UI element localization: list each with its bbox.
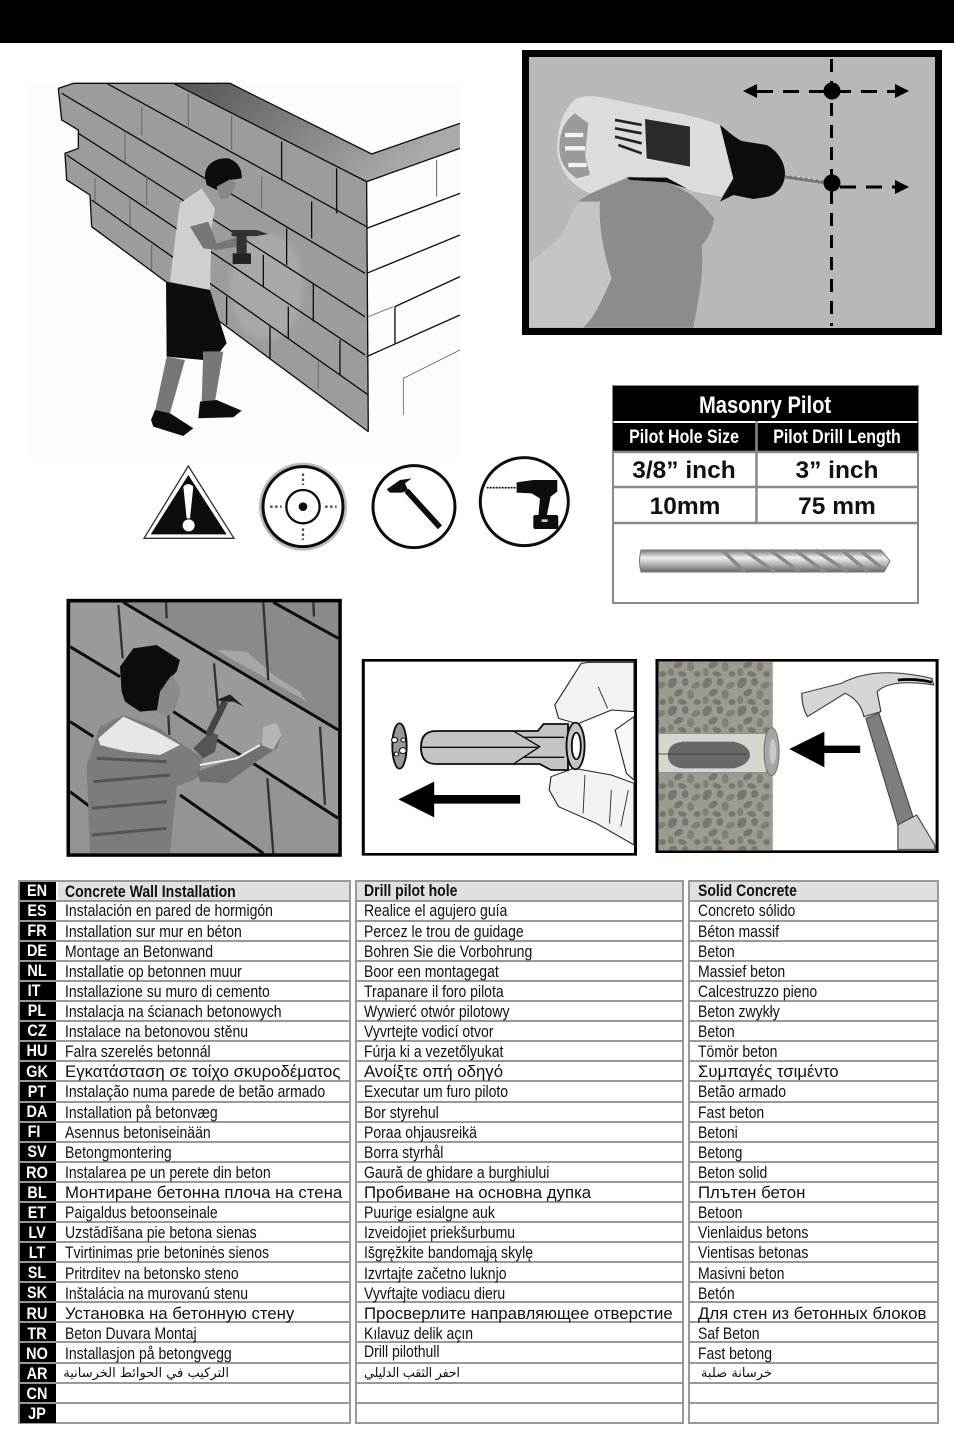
icon: cordless drill (480, 458, 568, 546)
man: t-shirt (87, 715, 203, 853)
column: concrete wall installation: Installatie op betonnen muur (65, 963, 242, 981)
column: drill pilot hole: Percez le trou de guidage (364, 923, 524, 941)
brick wall lines (70, 602, 338, 853)
column: solid concrete: Beton (698, 1023, 735, 1041)
column: solid concrete: Beton solid (698, 1164, 767, 1182)
panel frame (526, 54, 938, 332)
metric row: 10mm (650, 493, 720, 520)
arrow pointing left (789, 732, 860, 767)
column: solid concrete: Vientisas betonas (698, 1244, 809, 1262)
column: concrete wall installation: Installasjon på betongvegg (65, 1345, 232, 1363)
column: solid concrete: Solid Concrete (698, 882, 797, 900)
column: concrete wall installation: Instalacja na ścianach betonowych (65, 1003, 282, 1021)
man: head (205, 158, 242, 190)
language code column: FI (28, 1123, 40, 1141)
pilot hole and anchor (658, 733, 766, 773)
drill bit (785, 177, 825, 182)
wall anchor (421, 724, 568, 770)
table: Masonry Pilot specifications (613, 386, 918, 603)
column: drill pilot hole: Drill pilothull (364, 1343, 440, 1361)
column: drill pilot hole: Drill pilot hole (364, 882, 457, 900)
panel: hammering anchor into solid concrete (657, 660, 937, 852)
column: concrete wall installation: Instalación en pared de hormigón (65, 902, 273, 920)
language code column: JP (28, 1405, 46, 1423)
metric row (650, 493, 876, 520)
column: concrete wall installation: Монтиране бетонна плоча на стена (65, 1183, 343, 1202)
language code column: RO (26, 1164, 48, 1182)
column: concrete wall installation: Installation sur mur en béton (65, 923, 242, 941)
column: concrete wall installation: التركيب في الحوائط الخرسانية (63, 1366, 229, 1381)
language code column (20, 882, 56, 1423)
column: solid concrete: Concreto sólido (698, 902, 795, 920)
column headers: Pilot Drill Length (773, 426, 901, 447)
man: raised arms (197, 725, 282, 783)
language code column: HU (27, 1042, 47, 1060)
wall hole marker (392, 723, 407, 769)
column: solid concrete: Tömör beton (698, 1043, 777, 1061)
column: drill pilot hole: Executar um furo piloto (364, 1083, 508, 1101)
language code column: AR (27, 1365, 48, 1383)
language code column: LT (29, 1244, 46, 1262)
panel: inserting anchor into pilot hole (363, 660, 635, 854)
column: concrete wall installation: Pritrditev na betonsko steno (65, 1265, 239, 1283)
column: solid concrete (698, 882, 926, 1381)
table title (613, 386, 918, 421)
imperial row (632, 457, 879, 484)
column: solid concrete: Calcestruzzo pieno (698, 983, 817, 1001)
photo frame (68, 601, 340, 855)
column: solid concrete: Masivni beton (698, 1265, 784, 1283)
column: drill pilot hole (364, 882, 673, 1381)
fingers (555, 662, 634, 724)
language code column: FR (27, 922, 47, 940)
column: drill pilot hole: Izveidojiet priekšurbumu (364, 1224, 515, 1242)
imperial row: 3” inch (795, 457, 879, 484)
vertical dashed guide line (830, 59, 833, 326)
language code column: SV (27, 1143, 47, 1161)
column: drill pilot hole: Просверлите направляющее отверстие (364, 1304, 673, 1323)
man: shorts (166, 282, 227, 360)
concrete cross section (658, 662, 773, 850)
column: solid concrete: Fast beton (698, 1104, 764, 1122)
language code column: NO (26, 1345, 48, 1363)
man: legs (155, 352, 223, 413)
language code column: CZ (27, 1022, 47, 1040)
illustration: man drilling into concrete block wall (28, 83, 460, 458)
column: concrete wall installation: Установка на бетонную стену (65, 1304, 295, 1323)
column: drill pilot hole: Пробиване на основна дупка (364, 1183, 592, 1202)
man: arm (190, 222, 247, 250)
panel frame (363, 660, 635, 854)
icon: hammer (373, 466, 455, 548)
column: solid concrete: Saf Beton (698, 1325, 760, 1343)
column: concrete wall installation: Concrete Wall Installation (65, 883, 236, 901)
panel: drill with alignment guides (526, 54, 938, 332)
column: concrete wall installation: Installazione su muro di cemento (65, 983, 270, 1001)
column: concrete wall installation: Asennus betoniseinään (65, 1124, 211, 1142)
man: head (120, 645, 180, 712)
column: drill pilot hole: Gaură de ghidare a burghiului (364, 1164, 549, 1182)
multi-language translation table (19, 881, 938, 1423)
column: solid concrete: Beton (698, 943, 735, 961)
language code column: PL (28, 1002, 47, 1020)
column: solid concrete: Betoni (698, 1124, 738, 1142)
language code column: SK (27, 1284, 48, 1302)
language code column: NL (27, 962, 47, 980)
column: drill pilot hole: Wywierć otwór pilotowy (364, 1003, 510, 1021)
column headers (613, 423, 918, 451)
column: drill pilot hole: Bor styrehul (364, 1104, 439, 1122)
language code column: RU (27, 1305, 47, 1323)
column: concrete wall installation: Beton Duvara Montaj (65, 1325, 197, 1343)
language code column: IT (28, 982, 41, 1000)
upper dashed guide with arrows and marker (743, 82, 909, 100)
language code column: ET (28, 1204, 47, 1222)
column: concrete wall installation: Instalação numa parede de betão armado (65, 1083, 325, 1101)
column: solid concrete: Плътен бетон (698, 1183, 805, 1202)
language code column: DE (27, 942, 47, 960)
column: drill pilot hole: احفر الثقب الدليلي (364, 1366, 460, 1381)
imperial row: 3/8” inch (632, 457, 736, 484)
column: drill pilot hole: Bohren Sie die Vorbohrung (364, 943, 532, 961)
drill chuck (720, 125, 785, 202)
column: solid concrete: Beton zwykły (698, 1003, 780, 1021)
table title: Masonry Pilot (699, 391, 832, 418)
safety and tool icons (144, 458, 568, 549)
column: drill pilot hole: Vyvrtejte vodicí otvor (364, 1023, 494, 1041)
hammer (866, 713, 913, 825)
column: concrete wall installation: Betongmontering (65, 1144, 172, 1162)
column: concrete wall installation: Falra szerelés betonnál (65, 1043, 211, 1061)
hand (529, 177, 714, 328)
column: solid concrete: خرسانة صلبة (701, 1366, 772, 1381)
table background and border (613, 386, 918, 603)
lower dashed guide with arrow and marker (824, 174, 909, 194)
language code column: GK (26, 1063, 48, 1081)
drill body (557, 96, 733, 197)
column: solid concrete: Betong (698, 1144, 742, 1162)
column: solid concrete: Для стен из бетонных блоков (698, 1304, 926, 1323)
arrow pointing left (398, 782, 520, 817)
table grid (19, 881, 938, 1423)
chalk patch on wall (217, 650, 307, 702)
language code column: TR (27, 1325, 47, 1343)
language code column: DA (27, 1103, 47, 1121)
language code column: ES (27, 902, 47, 920)
man: shoes (151, 400, 242, 436)
man: drill (232, 230, 268, 264)
column: drill pilot hole: Vyvŕtajte vodiacu dieru (364, 1285, 505, 1303)
column: solid concrete: Betón (698, 1285, 735, 1303)
icon: target crosshair (260, 464, 346, 549)
column: drill pilot hole: Ανοίξτε οπή οδηγό (364, 1062, 503, 1081)
column headers: Pilot Hole Size (629, 426, 739, 447)
column: concrete wall installation: Εγκατάσταση σε τοίχο σκυροδέματος (65, 1062, 340, 1081)
hammer (208, 702, 225, 735)
column: solid concrete: Συμπαγές τσιμέντο (698, 1062, 839, 1081)
man: shirt (170, 188, 215, 290)
language code column: PT (28, 1083, 47, 1101)
column: drill pilot hole: Trapanare il foro pilota (364, 983, 504, 1001)
wall face highlight (230, 233, 303, 340)
column: drill pilot hole: Kılavuz delik açın (364, 1325, 473, 1343)
photo: hand holding drill (529, 96, 825, 328)
column: solid concrete: Vienlaidus betons (698, 1224, 809, 1242)
column: drill pilot hole: Realice el agujero guía (364, 902, 508, 920)
wall top surface (173, 83, 460, 182)
upper wall shade (123, 602, 338, 730)
column: concrete wall installation: Tvirtinimas prie betoninės sienos (65, 1244, 269, 1262)
drill vents (615, 120, 642, 153)
panel frame (657, 660, 937, 852)
column: concrete wall installation: Montage an Betonwand (65, 943, 213, 961)
column: drill pilot hole: Borra styrhål (364, 1144, 443, 1162)
column: drill pilot hole: Poraa ohjausreikä (364, 1124, 477, 1142)
column: solid concrete: Massief beton (698, 963, 785, 981)
panel: man hammering anchor into wall (68, 601, 340, 855)
column: solid concrete: Béton massif (698, 923, 780, 941)
column: drill pilot hole: Išgręžkite bandomąją skylę (364, 1244, 533, 1262)
language code column: CN (27, 1385, 47, 1403)
column: drill pilot hole: Boor een montagegat (364, 963, 499, 981)
column: concrete wall installation: Instalace na betonovou stěnu (65, 1023, 248, 1041)
metric row: 75 mm (798, 493, 876, 520)
column: concrete wall installation: Installation på betonvæg (65, 1104, 218, 1122)
language code column: BL (27, 1184, 47, 1202)
column: drill pilot hole: Izvrtajte začetno luknjo (364, 1265, 507, 1283)
drill label (645, 119, 690, 167)
language code column: LV (28, 1224, 46, 1242)
wall left face (58, 83, 368, 432)
column: concrete wall installation: Uzstādīšana pie betona sienas (65, 1224, 257, 1242)
column: solid concrete: Betoon (698, 1204, 742, 1222)
column: drill pilot hole: Puurige esialgne auk (364, 1204, 495, 1222)
top black header bar (0, 0, 954, 43)
column: solid concrete: Betão armado (698, 1083, 786, 1101)
drill bit image (640, 550, 890, 572)
wall mortar lines (58, 83, 460, 432)
column: concrete wall installation: Inštalácia na murovanú stenu (65, 1285, 248, 1303)
language code column: EN (27, 882, 47, 900)
column: concrete wall installation (63, 883, 343, 1381)
icon: warning triangle (144, 466, 234, 538)
language code column: SL (28, 1264, 47, 1282)
column: concrete wall installation: Paigaldus betoonseinale (65, 1204, 218, 1222)
column: solid concrete: Fast betong (698, 1345, 772, 1363)
column: concrete wall installation: Instalarea pe un perete din beton (65, 1164, 271, 1182)
column: drill pilot hole: Fúrja ki a vezetőlyukat (364, 1043, 504, 1061)
